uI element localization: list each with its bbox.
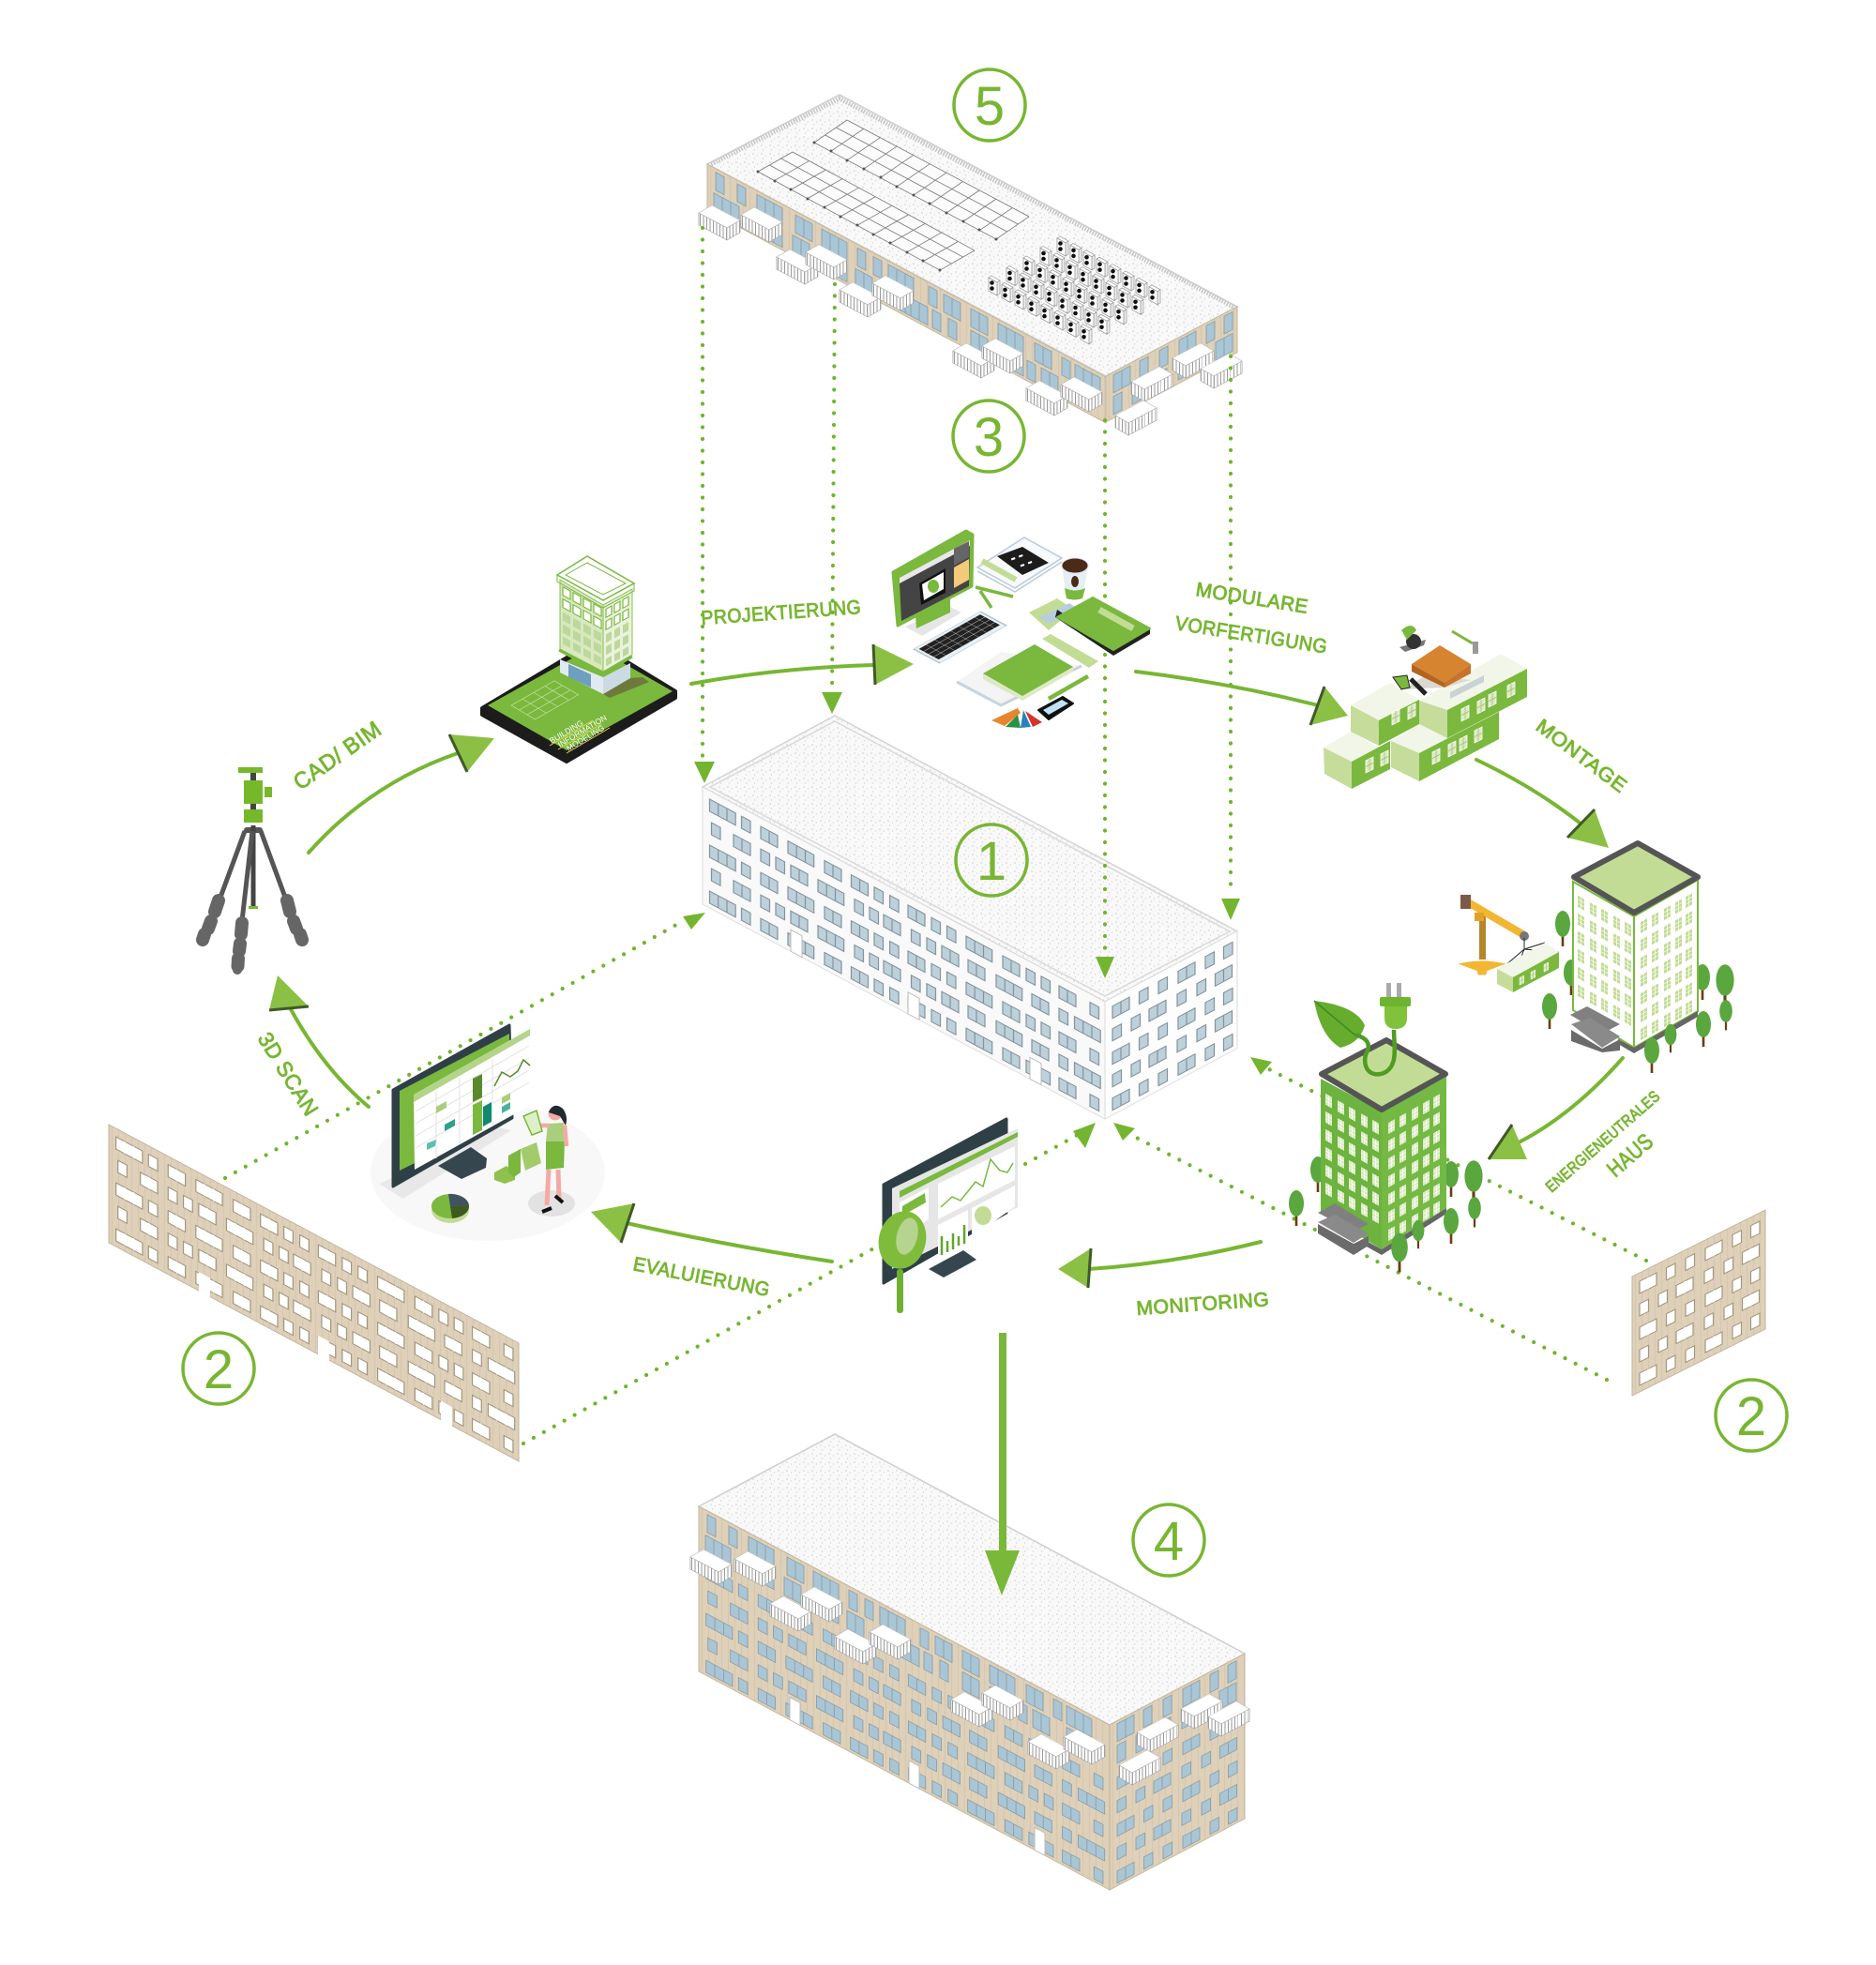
screen pie panel — [972, 1186, 1015, 1238]
cord — [1355, 1030, 1395, 1074]
tower walls — [1573, 882, 1634, 1048]
monitor frame — [884, 1119, 1006, 1283]
green walls — [1321, 1079, 1382, 1249]
timber stack — [1402, 645, 1471, 689]
trees in front of montage building — [1644, 1011, 1711, 1073]
screen side panel — [900, 1187, 929, 1238]
building 1: existing building — [703, 716, 1237, 1119]
monitor screen — [892, 1128, 1018, 1269]
tablet with BIM model — [482, 556, 675, 762]
module windows — [1366, 682, 1515, 773]
tripod icon — [198, 767, 308, 975]
big arrow to renovated building — [985, 1333, 1020, 1595]
axe — [1452, 631, 1478, 654]
label: 3D SCAN: 3D SCAN — [253, 1028, 324, 1120]
clipboard — [1029, 598, 1074, 630]
desktop monitor — [893, 531, 973, 626]
building 1 short facade — [1105, 931, 1237, 1119]
tower canopy — [1570, 1006, 1620, 1034]
heat pump units — [989, 236, 1160, 344]
energy-neutral building — [1314, 983, 1446, 1255]
dotted vertical and diagonal guide lines — [225, 228, 1646, 1444]
number 5 — [954, 69, 1025, 141]
spreadsheet — [414, 1029, 531, 1170]
crane lifting module — [1460, 895, 1559, 992]
model walls — [560, 580, 603, 672]
planning desk illustration — [893, 531, 1150, 728]
building 5 roof — [707, 95, 1237, 376]
calculator — [997, 547, 1049, 575]
ruler — [1042, 634, 1098, 668]
arrow: Energieneutrales Haus — [1489, 1058, 1623, 1159]
arrow: Evaluierung — [591, 1203, 832, 1262]
building 1 long facade windows — [709, 799, 1100, 1112]
crane base — [1463, 962, 1501, 974]
pie chart — [431, 1194, 469, 1223]
tower base — [1618, 1011, 1698, 1053]
number 2 left — [183, 1333, 254, 1404]
prefabricated facade panel right — [1632, 1210, 1765, 1396]
trees behind energy-neutral building — [1289, 1156, 1483, 1227]
building 4 long facade — [699, 1506, 1110, 1890]
prefabricated modules with tools — [1324, 626, 1527, 789]
floor disc — [371, 1104, 605, 1241]
evaluation illustration — [371, 1025, 605, 1241]
icon: plug — [1380, 983, 1411, 1029]
drawing sheet — [977, 537, 1062, 588]
monitoring monitor with magnifier — [872, 1119, 1018, 1313]
coffee cup — [1062, 566, 1088, 598]
number 4 — [1133, 1504, 1204, 1576]
green screen — [400, 1034, 509, 1171]
building 1 entrance doors — [791, 930, 1041, 1085]
tablet caption: MODELING — [565, 723, 606, 753]
building 1 long facade — [703, 787, 1105, 1119]
module upper left — [1351, 683, 1419, 746]
spreadsheet highlights — [427, 1060, 530, 1150]
monitor stand — [929, 1250, 976, 1277]
module lower left — [1324, 732, 1390, 789]
building 4 roof — [699, 1434, 1245, 1725]
circular saw — [1399, 626, 1426, 652]
label: ENERGIENEUTRALES: ENERGIENEUTRALES — [1542, 1087, 1664, 1196]
label: MONITORING: MONITORING — [1136, 1289, 1270, 1320]
green book — [983, 667, 1073, 701]
building 4 short facade — [1110, 1654, 1245, 1890]
number 2 right: 2 — [1736, 1386, 1766, 1447]
tablet floor plan — [511, 681, 578, 719]
model base — [560, 659, 603, 694]
notebook — [1055, 610, 1150, 656]
trees behind montage building — [1542, 911, 1734, 1030]
panel door cut-outs — [199, 1272, 452, 1427]
keyboard — [914, 612, 1006, 663]
chainsaw — [1393, 675, 1426, 694]
green pencil — [1049, 676, 1088, 699]
building 1 short facade windows — [1112, 942, 1233, 1111]
person — [523, 1106, 575, 1217]
canopy — [1318, 1203, 1369, 1232]
number 3: 3 — [974, 407, 1004, 468]
montage tower building — [1570, 843, 1698, 1053]
number 2 left: 2 — [204, 1339, 234, 1400]
tablet caption: INFORMATION — [556, 713, 608, 749]
model windows — [563, 587, 601, 665]
icon: leaf — [1314, 1001, 1365, 1048]
module upper right — [1419, 654, 1527, 738]
windows — [1325, 1094, 1379, 1224]
building 4 balconies — [690, 1549, 1249, 1785]
tablet caption: BUILDING — [548, 718, 584, 746]
building 1 roof — [703, 716, 1237, 1002]
colour swatch fan — [991, 708, 1021, 726]
building 5 long facade — [707, 164, 1106, 423]
hoist cables — [1505, 938, 1559, 977]
trees in front of energy-neutral building — [1391, 1208, 1459, 1272]
number 1 — [956, 824, 1027, 896]
crane boom — [1468, 902, 1524, 935]
monitor stand — [905, 607, 961, 636]
label: PROJEKTIERUNG: PROJEKTIERUNG — [701, 597, 862, 629]
building 4 doors — [790, 1698, 1045, 1855]
tablet surface — [488, 646, 673, 750]
arrow: Modulare Vorfertigung — [1136, 672, 1348, 725]
module lower right — [1391, 712, 1499, 781]
building 5: roof with PV and heat pumps — [699, 95, 1242, 435]
magnifier — [872, 1206, 932, 1313]
building 5 balconies — [699, 205, 1242, 435]
label: HAUS: HAUS — [1602, 1128, 1658, 1183]
hand saw — [1450, 675, 1484, 699]
arrow: 3D Scan — [269, 975, 369, 1107]
prefabricated facade panel left — [109, 1125, 519, 1462]
lifted module — [1497, 943, 1559, 977]
roof — [1322, 1040, 1445, 1110]
arrow: Monitoring — [1058, 1242, 1261, 1288]
screen chart panel — [938, 1146, 1015, 1219]
arrow: CAD/BIM — [309, 734, 494, 853]
compass tool — [976, 587, 1013, 608]
arrow: Projektierung — [691, 644, 914, 685]
tower windows — [1578, 896, 1631, 1026]
label: MONTAGE: MONTAGE — [1532, 716, 1631, 797]
monitor frame — [393, 1025, 512, 1187]
building 1 parapet — [710, 721, 1230, 996]
solar array mounting points — [756, 141, 998, 272]
screen header bar — [900, 1132, 1018, 1198]
number 4: 4 — [1154, 1511, 1184, 1572]
smartphone — [1038, 697, 1073, 719]
building 5 short facade — [1106, 307, 1237, 422]
crane mast — [1479, 913, 1486, 960]
tower roof — [1574, 843, 1698, 913]
number 3 — [953, 401, 1024, 472]
solar array front — [758, 152, 975, 270]
number 5: 5 — [975, 76, 1005, 137]
label: MODULARE: MODULARE — [1194, 579, 1309, 618]
label: EVALUIERUNG: EVALUIERUNG — [631, 1253, 772, 1301]
model roof — [557, 556, 634, 600]
label: VORFERTIGUNG: VORFERTIGUNG — [1173, 612, 1329, 658]
solar array back — [814, 120, 1029, 239]
model shadow — [603, 677, 649, 698]
pencil on sheet — [982, 561, 1016, 580]
monitor stand — [438, 1147, 487, 1179]
screen bars panel — [938, 1210, 968, 1260]
arrow: Montage — [1476, 760, 1609, 848]
number 2 right — [1716, 1380, 1787, 1451]
monitor screen — [900, 544, 970, 621]
green bar cubes — [494, 1142, 541, 1184]
tablet body — [482, 642, 675, 762]
label: CAD/ BIM: CAD/ BIM — [289, 717, 386, 795]
base strip — [1365, 1208, 1446, 1255]
building 4: renovated building — [690, 1434, 1249, 1890]
sheets under book — [957, 652, 1082, 705]
number 1: 1 — [976, 831, 1006, 892]
